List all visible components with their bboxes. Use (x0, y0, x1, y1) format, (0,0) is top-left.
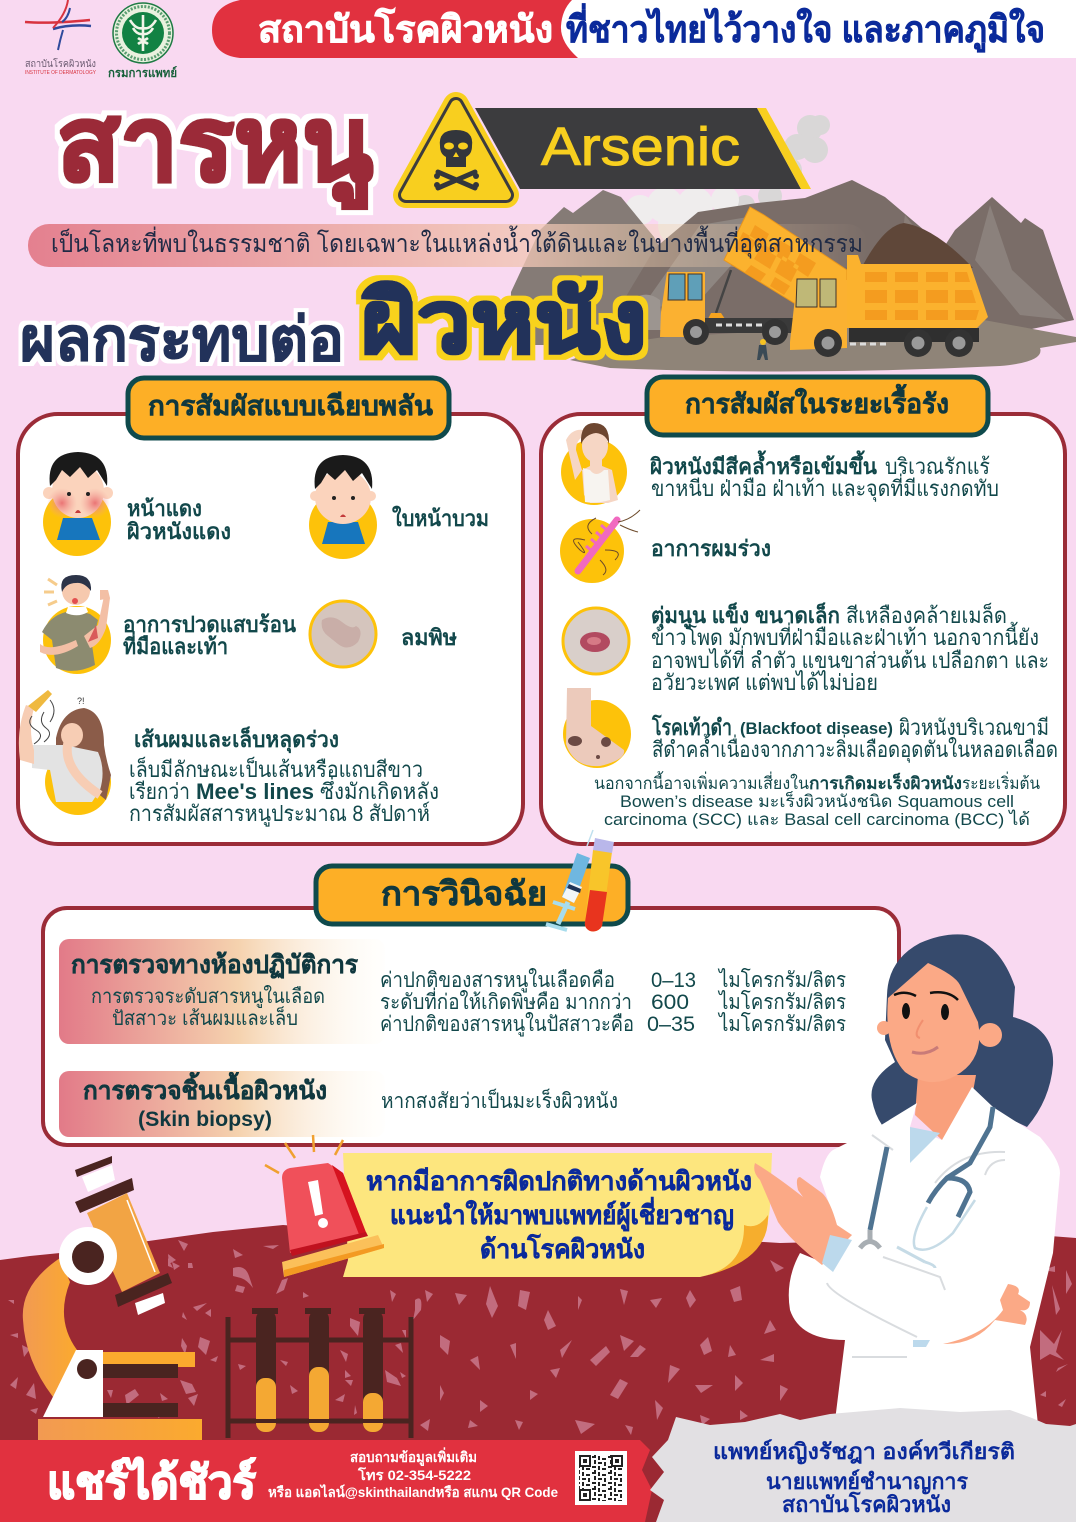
text: hard small bumps: อวัยวะเพศ แต่พบได้ไม่บ่อย (651, 670, 878, 695)
panel: author credit: แพทย์หญิงรัชฎา องค์ทวีเกียรติ (713, 1439, 1015, 1465)
text: hair and nail loss (129, 725, 439, 827)
box: laboratory tests (59, 939, 385, 1044)
text: hard small bumps (651, 601, 1049, 695)
icon: woman losing hair: ?! (77, 696, 85, 706)
label: hives: ลมพิษ (401, 625, 457, 650)
text: hair and nail loss: เรียกว่า (129, 779, 190, 804)
panel heading: การวินิจฉัย (381, 875, 547, 912)
title: arsenic in Thai: สารหนู (57, 87, 373, 209)
text: reference values: ค่าปกติของสารหนูในปัสสาวะคือ (380, 1012, 634, 1037)
text: reference values: ไมโครกรัม/ลิตร (717, 968, 846, 992)
text: blackfoot disease (651, 714, 1058, 763)
box: skin biopsy: การตรวจชิ้นเนื้อผิวหนัง (83, 1071, 327, 1105)
label: burning pain: ที่มือและเท้า (123, 630, 228, 659)
white smoke (625, 186, 739, 247)
grey smoke (735, 115, 830, 215)
QR code (575, 1451, 627, 1505)
text: reference values (380, 968, 846, 1037)
label: red face and skin: ผิวหนังแดง (127, 519, 231, 544)
heading: skin: ผิวหนัง (361, 275, 647, 371)
icon: woman with dark armpit (561, 423, 627, 505)
stethoscope (860, 1107, 993, 1268)
icon: hives photo (310, 601, 376, 667)
dark red lower background (0, 1225, 1076, 1522)
icon: syringe and blood tube (546, 830, 614, 931)
text: blackfoot disease: (Blackfoot disease) (740, 719, 893, 738)
ear (978, 1023, 1002, 1047)
text: skin cancer risk: ระยะเริ่มต้น (962, 771, 1040, 793)
logo: department of medical services: กรมการแพทย์ (108, 66, 177, 80)
illustration: doctor (754, 934, 1060, 1445)
icon: comb with falling hair (560, 510, 640, 583)
illustration: rear dump truck (660, 207, 847, 345)
pointing hand (754, 1163, 852, 1265)
text: darkened skin: ผิวหนังมีสีคล้ำหรือเข้มขึ้น (650, 450, 877, 479)
icon: blackfoot (563, 688, 631, 768)
logo: institute of dermatology: สถาบันโรคผิวหนัง (25, 57, 96, 70)
rubble (622, 295, 662, 330)
text: skin cancer risk: Bowen’s disease มะเร็งผิวหนังชนิด Squamous cell (620, 790, 1014, 811)
arsenic banner (475, 108, 811, 189)
coat (789, 1087, 1060, 1445)
text: hard small bumps: สีเหลืองคล้ายเมล็ด (846, 601, 1007, 628)
panel: chronic exposure (541, 377, 1065, 844)
panel heading: การสัมผัสแบบเฉียบพลัน (148, 391, 434, 421)
icon: test tube rack (226, 1308, 412, 1438)
callout: see a dermatologist (343, 1153, 772, 1277)
text: hard small bumps: ตุ่มนูน แข็ง ขนาดเล็ก (651, 601, 840, 630)
subtitle text: เป็นโลหะที่พบในธรรมชาติ โดยเฉพาะในแหล่งน้ำใต้ดินและในบางพื้นที่อุตสาหกรรม (51, 225, 863, 259)
text: skin cancer risk: นอกจากนี้อาจเพิ่มความเสี่ยงใน (594, 771, 809, 793)
label: red face and skin (127, 496, 231, 544)
header banner (212, 0, 1076, 58)
callout: see a dermatologist: ด้านโรคผิวหนัง (480, 1233, 645, 1264)
icon: alarm siren (265, 1135, 384, 1277)
illustration: front dump truck (790, 255, 988, 357)
text: reference values: ค่าปกติของสารหนูในเลือดคือ (380, 968, 615, 993)
header banner: สถาบันโรคผิวหนัง (258, 7, 553, 50)
label: red face and skin: หน้าแดง (127, 496, 202, 521)
face (887, 963, 979, 1082)
mountains (510, 190, 668, 345)
box: skin biopsy: (Skin biopsy) (138, 1108, 272, 1131)
confetti texture (8, 1240, 1072, 1435)
worker (757, 339, 768, 360)
text: reference values: 600 (651, 991, 689, 1014)
icon: hazard triangle with skull (406, 105, 506, 195)
text: hard small bumps: ข้าวโพด มักพบที่ฝ่ามือและฝ่าเท้า นอกจากนี้ยัง (651, 622, 1039, 650)
text: blackfoot disease: ผิวหนังบริเวณขามี (899, 715, 1049, 740)
panel: author credit: นายแพทย์ชำนาญการ (766, 1469, 968, 1495)
panel heading (128, 378, 449, 438)
logo: institute of dermatology (25, 0, 97, 76)
coat folds (827, 1135, 1005, 1357)
text: hair loss: อาการผมร่วง (651, 536, 771, 561)
text: reference values: ระดับที่ก่อให้เกิดพิษคือ มากกว่า (380, 987, 632, 1014)
icon: man with burning rash (40, 575, 111, 674)
text: darkened skin: ขาหนีบ ฝ่ามือ ฝ่าเท้า และจุดที่มีแรงกดทับ (651, 473, 999, 502)
arsenic banner: Arsenic (541, 117, 740, 177)
box: laboratory tests: ปัสสาวะ เส้นผมและเล็บ (112, 1005, 298, 1030)
text: reference values: 0–13 (651, 969, 696, 992)
label: burning pain: อาการปวดแสบร้อน (123, 612, 296, 637)
text: hair and nail loss: ซึ่งมักเกิดหลัง (320, 776, 439, 804)
icon: skin lesion photo (563, 608, 629, 674)
logo: department of medical services (108, 3, 177, 80)
text: reference values: ไมโครกรัม/ลิตร (717, 1012, 846, 1036)
icon: woman losing hair (19, 690, 111, 815)
panel: acute exposure (18, 378, 523, 844)
panel heading: การสัมผัสในระยะเรื้อรัง (685, 383, 949, 419)
subtitle band (28, 224, 868, 267)
text: reference values: 0–35 (647, 1013, 695, 1036)
text: skin cancer risk (594, 771, 1040, 829)
heading: effects on: ผลกระทบต่อ (20, 306, 344, 373)
box: laboratory tests: การตรวจทางห้องปฏิบัติการ (71, 951, 359, 979)
text: hair and nail loss: Mee's lines (196, 779, 314, 804)
panel heading (647, 377, 988, 435)
footer: contact bar: แชร์ได้ชัวร์ (47, 1456, 256, 1508)
icon: microscope (23, 1156, 202, 1440)
panel heading (316, 866, 628, 924)
text: biopsy indication: หากสงสัยว่าเป็นมะเร็งผิวหนัง (381, 1087, 618, 1113)
shirt (910, 1127, 940, 1163)
callout: see a dermatologist: แนะนำให้มาพบแพทย์ผู้เชี่ยวชาญ (390, 1196, 734, 1232)
label: burning pain (123, 612, 296, 659)
icon: boy with red face (43, 452, 113, 556)
box: skin biopsy (59, 1071, 385, 1137)
text: skin cancer risk: การเกิดมะเร็งผิวหนัง (809, 771, 962, 793)
neck (915, 1075, 976, 1140)
icon: boy with swollen face (309, 455, 377, 559)
footer: contact bar (0, 1440, 652, 1522)
panel: diagnosis (43, 830, 899, 1145)
callout: see a dermatologist: หากมีอาการผิดปกติทางด้านผิวหนัง (366, 1166, 752, 1196)
footer: contact bar: สอบถามข้อมูลเพิ่มเติม (350, 1447, 477, 1466)
footer: contact bar: หรือ แอดไลน์@skinthailandหรือ สแกน QR Code (268, 1483, 558, 1500)
illustration: mountains and smoke (510, 115, 1076, 372)
text: reference values: ไมโครกรัม/ลิตร (717, 990, 846, 1014)
panel: author credit: สถาบันโรคผิวหนัง (782, 1491, 951, 1517)
text: hair and nail loss: การสัมผัสสารหนูประมาณ 8 สัปดาห์ (129, 801, 430, 827)
text: hair and nail loss: เล็บมีลักษณะเป็นเส้นหรือแถบสีขาว (129, 755, 423, 782)
logo: institute of dermatology: INSTITUTE OF DERMATOLOGY (25, 70, 97, 76)
hair and buns (871, 934, 1053, 1127)
text: skin cancer risk: carcinoma (SCC) และ Basal cell carcinoma (BCC) ได้ (604, 809, 1030, 829)
text: darkened skin: บริเวณรักแร้ (885, 454, 990, 479)
dirt pile (863, 223, 973, 268)
text: blackfoot disease: โรคเท้าดำ (651, 714, 732, 740)
cuff (822, 1235, 852, 1272)
footer: contact bar: โทร 02-354-5222 (357, 1466, 471, 1483)
crossed-arm hand (943, 1284, 1030, 1344)
box: laboratory tests: การตรวจระดับสารหนูในเลือด (91, 985, 325, 1009)
panel: author credit (650, 1408, 1076, 1522)
ground (570, 320, 1076, 372)
label: swollen face: ใบหน้าบวม (392, 505, 489, 531)
text: hair and nail loss: เส้นผมและเล็บหลุดร่วง (134, 725, 339, 754)
text: darkened skin (650, 450, 999, 502)
